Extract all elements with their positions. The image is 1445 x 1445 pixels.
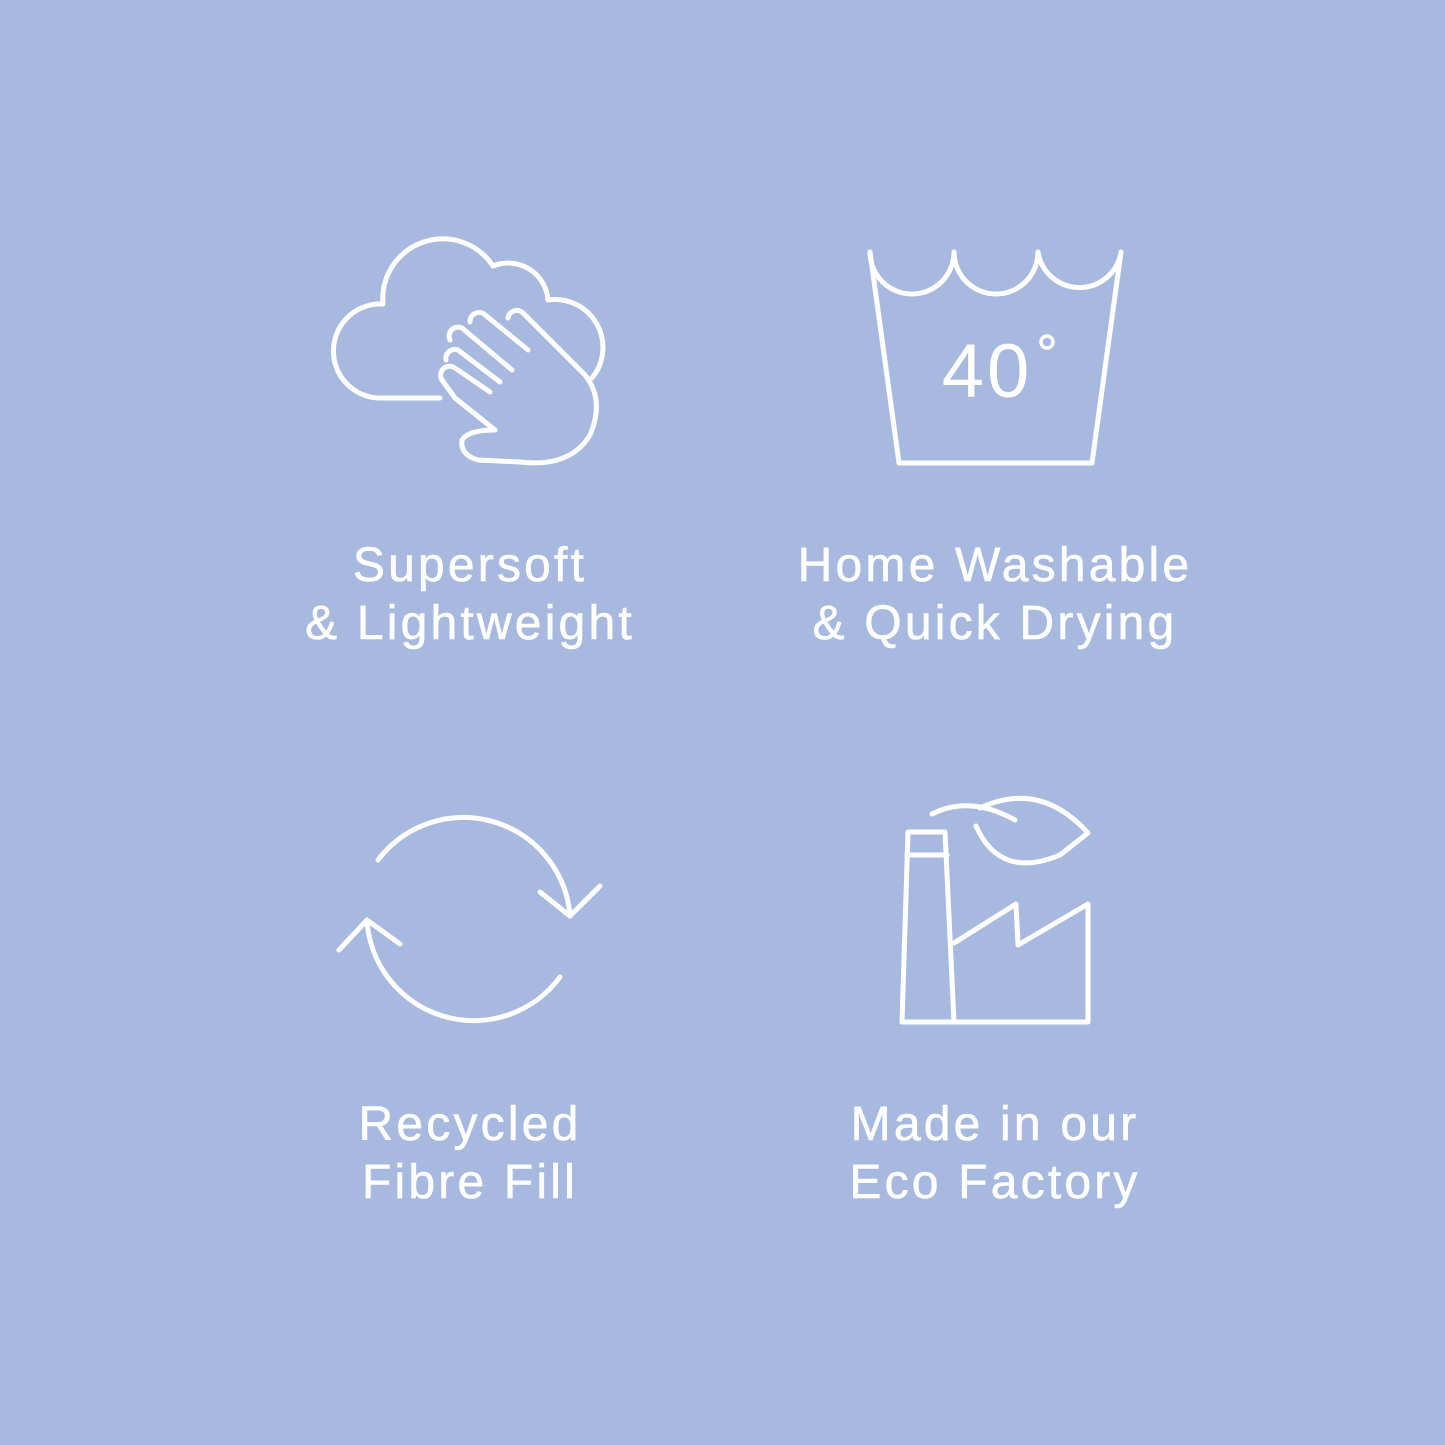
text: supersoft — [305, 539, 635, 650]
text: recycled: Fibre Fill — [362, 1156, 578, 1209]
icon: recycle arrows — [339, 817, 600, 1021]
text: recycled — [358, 1098, 582, 1209]
icon: cloud with hand — [333, 239, 603, 463]
text: recycled: Recycled — [358, 1098, 582, 1151]
icon: eco factory — [902, 798, 1088, 1022]
text: eco factory — [849, 1098, 1141, 1209]
text: supersoft: Supersoft — [353, 539, 587, 592]
text: home washable — [798, 539, 1192, 650]
icon: wash tub 40: 40 — [942, 329, 1032, 414]
text: supersoft: & Lightweight — [305, 597, 635, 650]
text: home washable: & Quick Drying — [813, 597, 1177, 650]
text: eco factory: Made in our — [851, 1098, 1139, 1151]
text: home washable: Home Washable — [798, 539, 1192, 592]
text: eco factory: Eco Factory — [849, 1156, 1141, 1209]
icon: wash tub 40 — [870, 252, 1121, 463]
